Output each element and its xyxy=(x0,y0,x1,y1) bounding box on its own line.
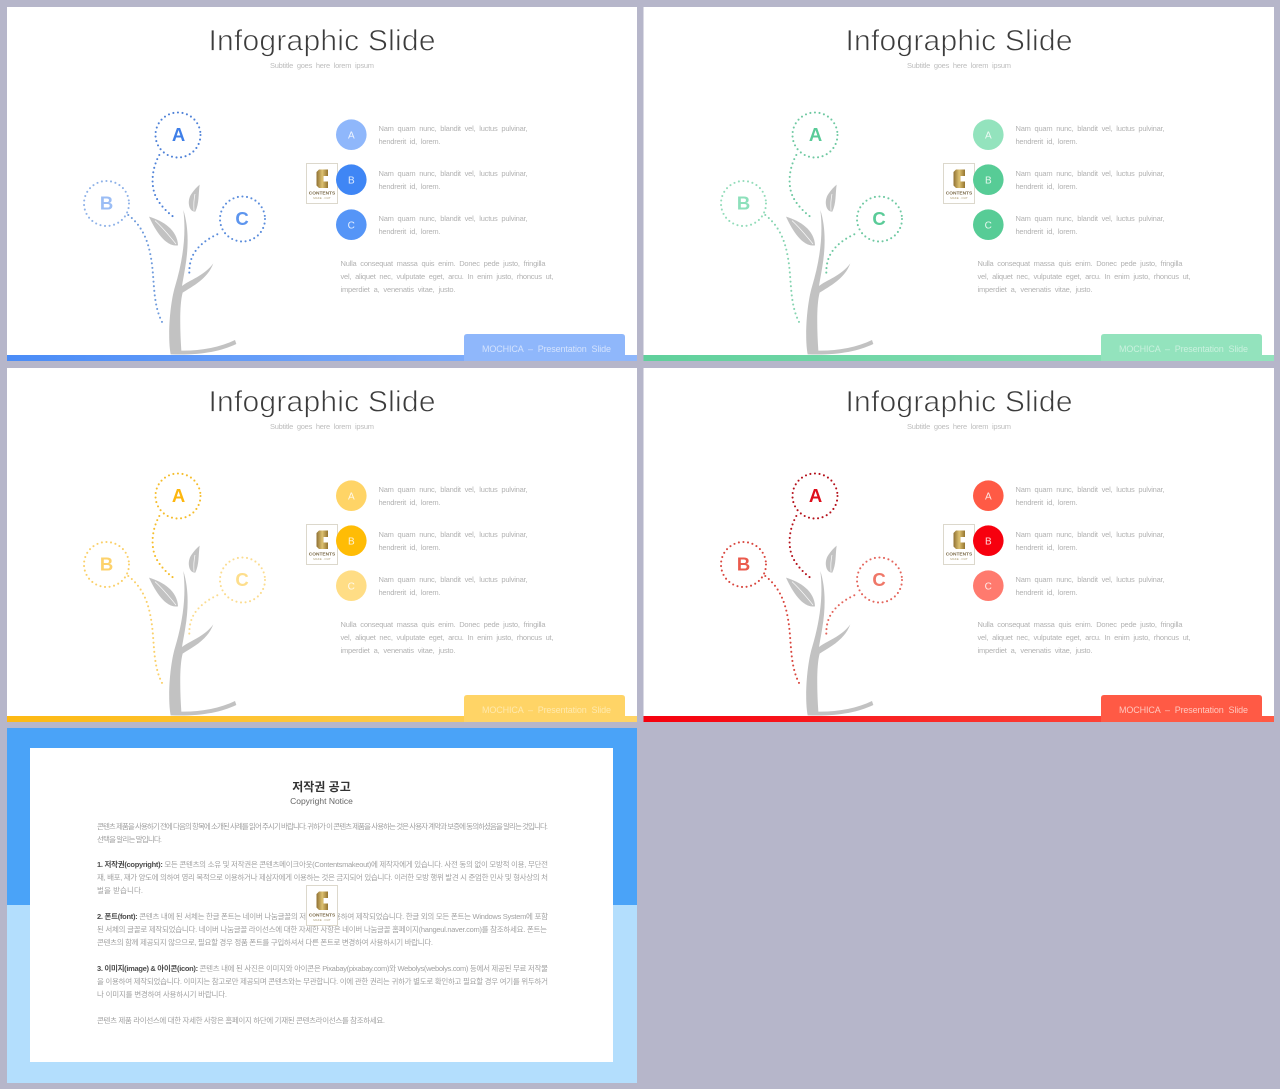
paragraph xyxy=(978,259,1190,294)
bottom bar xyxy=(644,355,1274,361)
callout B bubble xyxy=(721,542,800,685)
section 1: copyright: 1. 저작권(copyright): 모든 콘텐츠의 소유 및 저작권은 콘텐츠메이크아웃(Contentsmakeout)에 제작자에게 있습니다. 사전 동의 없이 모방적 이용, 무단전 xyxy=(97,859,548,869)
section 2: font xyxy=(97,911,548,947)
callout A bubble: A xyxy=(809,124,822,145)
callout B bubble: B xyxy=(100,554,113,574)
callout B bubble: B xyxy=(100,192,113,214)
item C xyxy=(973,570,1164,601)
item C: C xyxy=(985,220,992,232)
callout C bubble xyxy=(189,196,265,273)
logo stamp xyxy=(306,164,338,204)
item C xyxy=(336,570,528,601)
paragraph: imperdiet a, venenatis vitae, justo. xyxy=(340,285,456,294)
item B: B xyxy=(348,536,355,548)
item C: C xyxy=(348,220,355,232)
paragraph: imperdiet a, venenatis vitae, justo. xyxy=(340,646,456,655)
paragraph xyxy=(978,620,1190,655)
item B xyxy=(973,164,1164,195)
item C xyxy=(336,209,528,240)
callout C bubble: C xyxy=(235,569,249,590)
paragraph: Nulla consequat massa quis enim. Donec pede justo, fringilla xyxy=(978,259,1183,268)
section 2: font: 2. 폰트(font): 콘텐츠 내에 된 서체는 한글 폰트는 네이버 나눔글꼴의 저작물을 사용하여 제작되었습니다. 한글 외의 모든 폰트는 Windows System에 포함 xyxy=(97,911,548,921)
item A: Nam quam nunc, blandit vel, luctus pulvinar, xyxy=(378,124,528,133)
item A: hendrerit id, lorem. xyxy=(1016,137,1078,146)
item A: A xyxy=(348,130,355,142)
paragraph: vel, aliquet nec, vulputate eget, arcu. In enim justo, rhoncus ut, xyxy=(340,272,554,281)
item C xyxy=(973,209,1164,240)
tree illustration xyxy=(149,185,236,354)
title: Infographic Slide xyxy=(208,386,436,418)
bottom bar xyxy=(7,716,637,722)
footer tab: MOCHICA – Presentation Slide xyxy=(482,344,611,354)
slide 4: red xyxy=(644,368,1274,722)
section 3: image and icon xyxy=(97,963,548,999)
section 3: image and icon: 나 이미지를 변경하여 사용하시기 바랍니다. xyxy=(97,989,227,999)
callout C bubble xyxy=(826,558,902,634)
subtitle: Subtitle goes here lorem ipsum xyxy=(270,422,374,431)
item B: B xyxy=(985,536,992,548)
subtitle: Subtitle goes here lorem ipsum xyxy=(907,422,1011,431)
bottom bar xyxy=(644,716,1274,722)
intro text: 선택을 알리는 말입니다. xyxy=(97,834,162,844)
paragraph: vel, aliquet nec, vulputate eget, arcu. In enim justo, rhoncus ut, xyxy=(340,633,554,642)
tree illustration xyxy=(786,185,873,354)
paragraph: imperdiet a, venenatis vitae, justo. xyxy=(978,646,1092,655)
item B: hendrerit id, lorem. xyxy=(378,182,440,191)
footer tab xyxy=(464,695,625,722)
item C: C xyxy=(985,582,992,592)
slide 1: blue xyxy=(7,7,637,361)
item B: B xyxy=(348,176,355,186)
slide 2: green xyxy=(644,7,1274,361)
item A: hendrerit id, lorem. xyxy=(378,137,440,146)
item A: hendrerit id, lorem. xyxy=(378,498,440,507)
callout C bubble: C xyxy=(235,208,249,229)
item C: C xyxy=(348,582,355,592)
item A: A xyxy=(348,492,355,502)
section 1: copyright xyxy=(97,859,548,895)
item C: Nam quam nunc, blandit vel, luctus pulvinar, xyxy=(378,575,528,584)
item B xyxy=(336,164,528,195)
callout C bubble: C xyxy=(872,569,886,590)
callout B bubble xyxy=(84,542,163,685)
paragraph xyxy=(340,620,554,655)
paragraph: vel, aliquet nec, vulputate eget, arcu. In enim justo, rhoncus ut, xyxy=(978,272,1190,281)
logo stamp xyxy=(944,524,974,564)
footer tab xyxy=(1101,334,1262,361)
footer tab xyxy=(1101,695,1262,722)
item A xyxy=(336,119,528,150)
intro text xyxy=(97,821,548,844)
item B xyxy=(336,525,528,556)
footer tab: MOCHICA – Presentation Slide xyxy=(1119,705,1248,715)
callout C bubble xyxy=(189,558,265,634)
item A: Nam quam nunc, blandit vel, luctus pulvinar, xyxy=(1016,124,1164,133)
tree illustration xyxy=(786,546,873,715)
footer tab: MOCHICA – Presentation Slide xyxy=(482,705,611,715)
item B: Nam quam nunc, blandit vel, luctus pulvinar, xyxy=(1016,530,1164,539)
callout A bubble xyxy=(790,112,838,217)
item A: Nam quam nunc, blandit vel, luctus pulvinar, xyxy=(378,485,528,494)
slide 3: yellow xyxy=(7,368,637,722)
item C: hendrerit id, lorem. xyxy=(1016,227,1078,236)
closing line: 콘텐츠 제품 라이선스에 대한 자세한 사항은 홈페이지 하단에 기재된 콘텐츠라이선스를 참조하세요. xyxy=(97,1015,385,1025)
item B: hendrerit id, lorem. xyxy=(1016,543,1078,552)
item B: Nam quam nunc, blandit vel, luctus pulvinar, xyxy=(378,530,528,539)
paragraph: Nulla consequat massa quis enim. Donec pede justo, fringilla xyxy=(340,620,546,629)
item C: Nam quam nunc, blandit vel, luctus pulvinar, xyxy=(1016,214,1164,223)
section 2: font: 콘텐츠의 함께 제공되지 않으므로, 필요할 경우 정품 폰트를 구입하셔서 다른 폰트로 변경하여 사용하시기 바랍니다. xyxy=(97,937,433,947)
callout B bubble: B xyxy=(737,554,750,574)
footer tab xyxy=(464,334,625,361)
logo stamp xyxy=(944,164,974,204)
item B: Nam quam nunc, blandit vel, luctus pulvinar, xyxy=(378,169,528,178)
intro text: 콘텐츠 제품을 사용하기 전에 다음의 항목에 소개된 사례를 읽어 주시기 바랍니다. 귀하가 이 콘텐츠 제품을 사용하는 것은 사용자 계약과 보증에 동의하셨음을 알리는 것입니다. xyxy=(97,821,548,831)
logo stamp xyxy=(306,524,338,564)
callout A bubble xyxy=(153,112,200,217)
callout A bubble xyxy=(790,474,838,578)
item A xyxy=(973,480,1164,511)
callout A bubble: A xyxy=(809,485,822,506)
item B xyxy=(973,525,1164,556)
item A: Nam quam nunc, blandit vel, luctus pulvinar, xyxy=(1016,485,1164,494)
callout B bubble xyxy=(721,181,800,324)
callout C bubble xyxy=(826,196,902,273)
item A: hendrerit id, lorem. xyxy=(1016,498,1078,507)
subtitle: Subtitle goes here lorem ipsum xyxy=(270,61,374,70)
tree illustration xyxy=(149,546,236,715)
item C: Nam quam nunc, blandit vel, luctus pulvinar, xyxy=(378,214,528,223)
paragraph: vel, aliquet nec, vulputate eget, arcu. In enim justo, rhoncus ut, xyxy=(978,633,1190,642)
logo stamp xyxy=(306,886,338,926)
section 1: copyright: 벌을 받습니다. xyxy=(97,885,143,895)
title: Infographic Slide xyxy=(846,24,1072,58)
item B: hendrerit id, lorem. xyxy=(1016,182,1078,191)
bottom bar xyxy=(7,355,637,361)
callout B bubble: B xyxy=(737,192,750,214)
title: Infographic Slide xyxy=(208,24,436,58)
footer tab: MOCHICA – Presentation Slide xyxy=(1119,344,1248,354)
subtitle: Subtitle goes here lorem ipsum xyxy=(907,61,1011,70)
title: Infographic Slide xyxy=(846,386,1072,418)
callout A bubble xyxy=(153,474,200,578)
paragraph xyxy=(340,259,554,294)
section 3: image and icon: 3. 이미지(image) & 아이콘(icon): 콘텐츠 내에 된 사진은 이미지와 아이콘은 Pixabay(pixabay.com)와 Webolys(webolys.com) 등에서 제공된 무료 저작물 xyxy=(97,963,548,973)
item B: Nam quam nunc, blandit vel, luctus pulvinar, xyxy=(1016,169,1164,178)
notice heading: 저작권 공고 xyxy=(292,779,351,794)
item A xyxy=(973,119,1164,150)
item C: hendrerit id, lorem. xyxy=(378,227,440,236)
slide 5: copyright notice xyxy=(7,728,637,1083)
notice subheading: Copyright Notice xyxy=(290,796,353,806)
callout C bubble: C xyxy=(872,208,886,229)
section 3: image and icon: 을 이용하여 제작되었습니다. 이미지는 참고로만 제공되며 콘텐츠와는 무관합니다. 이에 관한 권리는 귀하가 별도로 확인하고 필요할 경우 여기를 위두하거 xyxy=(97,976,548,986)
callout B bubble xyxy=(84,181,163,324)
item C: Nam quam nunc, blandit vel, luctus pulvinar, xyxy=(1016,575,1164,584)
section 1: copyright: 재, 배포, 재가 양도에 의하여 영리 목적으로 이용하거나 제삼자에게 이용하는 것은 금지되어 있습니다. 이러한 모방 행위 발견 시 준엄한 민사 및 형사상의 처 xyxy=(97,872,548,882)
paragraph: imperdiet a, venenatis vitae, justo. xyxy=(978,285,1092,294)
item C: hendrerit id, lorem. xyxy=(1016,588,1078,597)
item C: hendrerit id, lorem. xyxy=(378,588,440,597)
paragraph: Nulla consequat massa quis enim. Donec pede justo, fringilla xyxy=(978,620,1183,629)
paragraph: Nulla consequat massa quis enim. Donec pede justo, fringilla xyxy=(340,259,546,268)
callout A bubble: A xyxy=(172,485,185,506)
callout A bubble: A xyxy=(172,124,185,145)
item A xyxy=(336,480,528,511)
item A: A xyxy=(985,130,992,142)
section 2: font: 된 서체의 글꼴로 제작되었습니다. 네이버 나눔글꼴 라이선스에 대한 자세한 사항은 네이버 나눔글꼴 홈페이지(hangeul.naver.com)를 참조하세요. 폰트는 xyxy=(97,924,547,934)
item A: A xyxy=(985,492,992,502)
item B: B xyxy=(985,176,992,186)
notice card xyxy=(30,748,613,1062)
item B: hendrerit id, lorem. xyxy=(378,543,440,552)
